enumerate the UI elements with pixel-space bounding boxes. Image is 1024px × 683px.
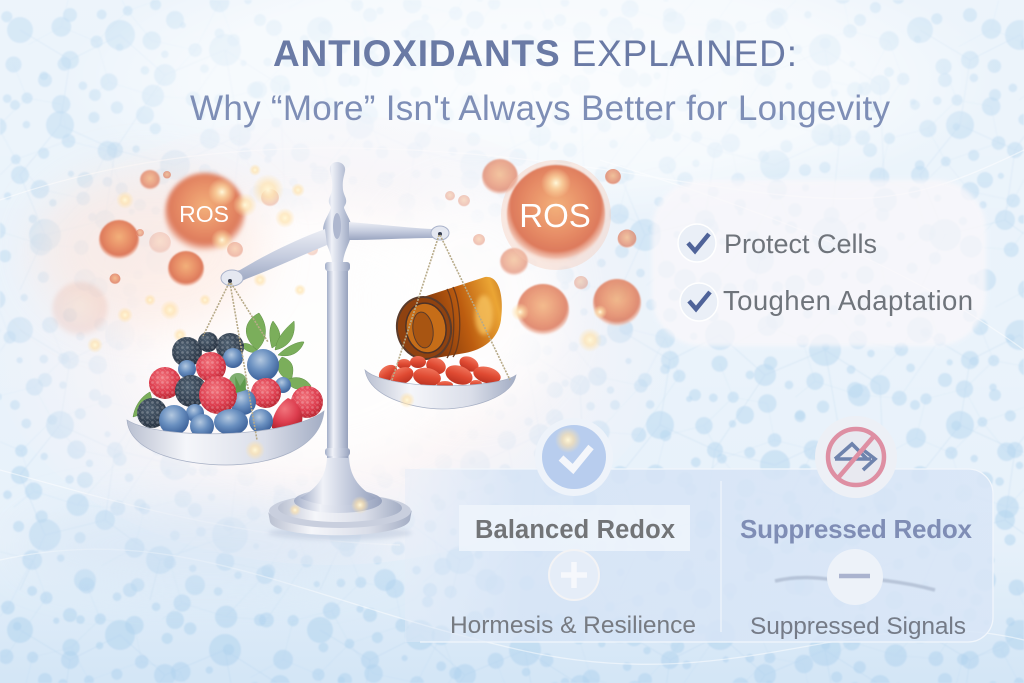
ROS orb right	[501, 160, 611, 270]
right pan	[365, 370, 516, 409]
icon: minus	[775, 549, 935, 605]
text: protect cells: Protect Cells	[724, 229, 877, 259]
berries and leaves	[133, 313, 323, 438]
left pan	[127, 411, 324, 465]
heading: balanced redox	[459, 505, 690, 551]
text: toughen adaptation: Toughen Adaptation	[723, 285, 973, 316]
icon: plus	[549, 550, 599, 600]
leaves	[133, 313, 311, 417]
icon: check toughen adaptation	[680, 283, 718, 321]
left chains	[203, 283, 268, 440]
softgel capsules	[376, 353, 503, 389]
ROS molecules, left cluster	[52, 164, 318, 353]
heading: balanced redox: Balanced Redox	[475, 516, 675, 544]
icon: balanced check badge	[535, 418, 613, 496]
icon: check protect cells	[678, 224, 716, 262]
ROS molecules, right cluster	[445, 159, 641, 352]
heading: suppressed redox: Suppressed Redox	[740, 514, 973, 544]
benefits panel	[652, 180, 986, 346]
scale beam	[221, 222, 449, 286]
title	[190, 33, 890, 128]
ROS orb right: ROS	[519, 197, 591, 234]
right chains	[392, 235, 510, 380]
balance scale	[127, 162, 516, 540]
title: ANTIOXIDANTS EXPLAINED:	[273, 33, 797, 74]
sparkles on scale	[245, 392, 415, 516]
supplement bottle	[393, 277, 502, 362]
subtitle: Why “More” Isn't Always Better for Longevity	[190, 89, 890, 128]
comparison panel	[405, 416, 993, 642]
text: suppressed signals: Suppressed Signals	[750, 613, 966, 640]
ROS orb left: ROS	[179, 201, 229, 227]
icon: blocked signal badge	[815, 416, 897, 498]
scale post	[323, 162, 352, 458]
scale base	[268, 455, 412, 540]
ROS orb left	[165, 173, 245, 253]
text: hormesis and resilience: Hormesis & Resilience	[450, 612, 696, 639]
